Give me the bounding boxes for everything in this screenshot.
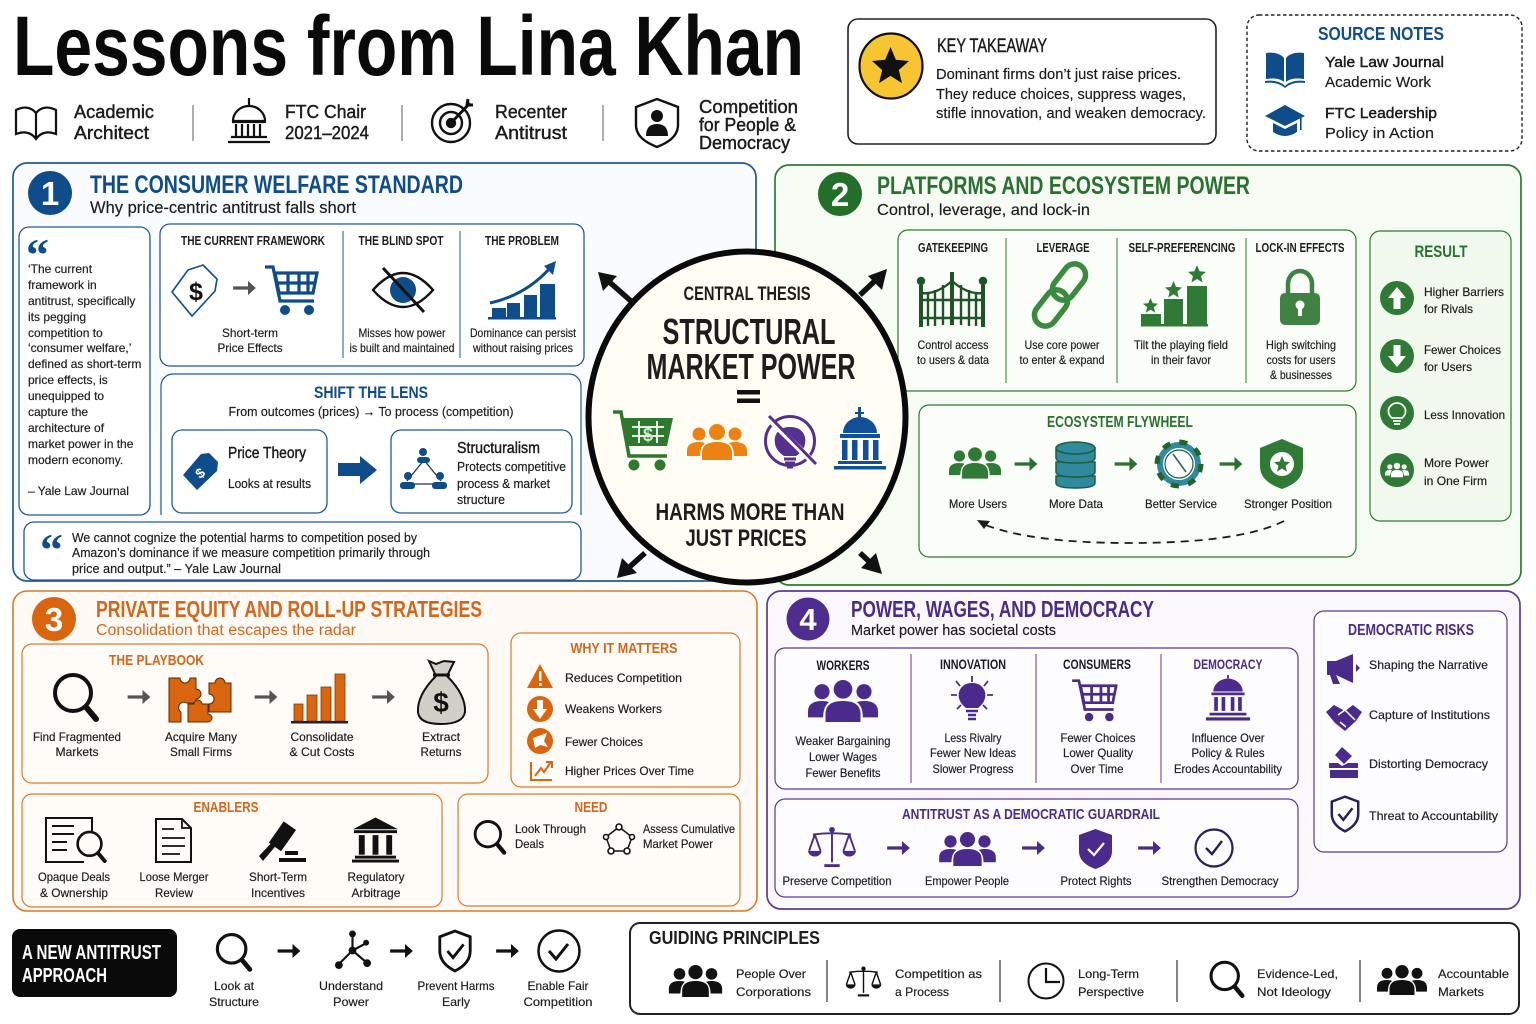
column: workers — [796, 658, 890, 780]
bottom quote: “ — [40, 524, 63, 575]
enabler: regulatory arbitrage: Regulatory — [348, 870, 404, 884]
column: the problem: Dominance can persist — [470, 326, 577, 340]
icon: green cart: $ — [643, 425, 653, 445]
role: academic architect: Architect — [74, 123, 149, 143]
quote text: price effects, is — [28, 373, 108, 387]
quote text: ‘The current — [28, 262, 93, 276]
column: leverage: Use core power — [1024, 338, 1100, 352]
role: competition for people and democracy: Competition — [699, 97, 798, 117]
enabler: loose merger review: Loose Merger — [140, 870, 208, 884]
source: Yale — [1325, 54, 1444, 91]
title: Lessons from Lina Khan — [13, 0, 804, 93]
column: democracy: Policy & Rules — [1192, 746, 1264, 760]
icon: blue book — [1265, 53, 1305, 88]
source: FTC: FTC Leadership — [1325, 105, 1437, 122]
why it matters: WHY IT MATTERS — [570, 640, 678, 657]
principle: accountable markets: Accountable — [1438, 967, 1509, 981]
headline: structural market power: MARKET POWER — [646, 346, 856, 387]
step: consolidate: & Cut Costs — [290, 745, 354, 759]
icon: orange people — [687, 424, 747, 460]
risk: capture: Capture of Institutions — [1369, 708, 1490, 722]
quote mark: “ — [26, 229, 49, 280]
icon: crossed eye — [373, 268, 433, 312]
column: consumers: Over Time — [1070, 762, 1124, 776]
quote box — [19, 227, 150, 515]
banner: a new antitrust approach — [12, 929, 177, 997]
banner: a new antitrust approach: APPROACH — [22, 965, 107, 987]
quote text: framework in — [28, 278, 97, 292]
step: look at structure — [209, 935, 259, 1009]
quote text: – Yale Law Journal — [28, 484, 129, 498]
ecosystem flywheel box — [919, 405, 1356, 557]
need: NEED — [574, 799, 608, 816]
result: fewer choices: Fewer Choices — [1424, 343, 1501, 357]
quote text: ‘consumer welfare,’ — [28, 341, 131, 355]
step: more users — [949, 447, 1007, 511]
result: more power — [1380, 453, 1489, 488]
principle: accountable markets: Markets — [1438, 985, 1484, 999]
principle: long-term perspective: Perspective — [1078, 985, 1144, 999]
need: look through deals: Look Through — [515, 822, 586, 836]
heading: RESULT — [1414, 242, 1468, 261]
panel 3: private equity and roll-up strategies — [13, 591, 757, 911]
column: workers: WORKERS — [816, 658, 870, 673]
bottom quote: We cannot cognize the potential harms to competition posed by — [72, 531, 418, 545]
approach flow — [209, 930, 592, 1009]
panel 4: power, wages, and democracy — [767, 591, 1520, 909]
step: strengthen democracy: Strengthen Democracy — [1162, 874, 1278, 888]
column: workers: Lower Wages — [809, 750, 877, 764]
central thesis — [588, 252, 906, 582]
item: weakens workers — [527, 696, 662, 722]
card: structuralism: structure — [457, 493, 505, 507]
number badge 2: 2 — [831, 176, 849, 213]
result box — [1370, 231, 1511, 521]
column: blind spot: is built and maintained — [350, 341, 454, 355]
principle: people over corporations: People Over — [736, 967, 806, 981]
step: protect rights — [1060, 829, 1132, 888]
step: look at structure: Structure — [209, 995, 259, 1009]
result: less innovation: Less Innovation — [1424, 408, 1505, 422]
principle: evidence-led — [1211, 962, 1338, 999]
step: empower people: Empower People — [925, 874, 1009, 888]
label: central thesis: CENTRAL THESIS — [684, 283, 810, 305]
subheading: Control, leverage, and lock-in — [877, 202, 1090, 219]
item: reduces competition: Reduces Competition — [565, 671, 682, 685]
arrows from center — [598, 269, 887, 578]
arrow: shift — [338, 456, 377, 484]
result: fewer choices — [1380, 339, 1501, 374]
role: academic architect: Academic — [74, 102, 154, 122]
icon: cart — [265, 267, 317, 315]
column: gatekeeping: to users & data — [917, 353, 989, 367]
principle: people over corporations — [669, 965, 811, 999]
heading: POWER, WAGES, AND DEMOCRACY — [851, 596, 1154, 622]
number badge 2 — [818, 172, 862, 216]
result: more power: More Power — [1424, 456, 1489, 470]
step: enable fair competition: Enable Fair — [528, 979, 588, 993]
icon: target — [432, 99, 473, 142]
label: acquire firms: Small Firms — [170, 745, 232, 759]
source: Yale: Yale Law Journal — [1325, 54, 1444, 71]
equals sign — [737, 390, 760, 403]
column: blind spot: THE BLIND SPOT — [358, 233, 444, 248]
column: consumers: Lower Quality — [1063, 746, 1133, 760]
column: current framework: Short-term — [222, 326, 278, 340]
icon: price tag — [172, 265, 217, 316]
principle: competition as a process: Competition as — [895, 967, 982, 981]
enabler: loose merger review — [140, 819, 208, 900]
item: higher prices: Higher Prices Over Time — [565, 764, 694, 778]
column: democracy — [1174, 657, 1282, 776]
risk: accountability — [1332, 797, 1498, 831]
heading: SHIFT THE LENS — [314, 383, 428, 402]
step: preserve competition — [782, 827, 892, 888]
column: gatekeeping: Control access — [918, 338, 988, 352]
step: prevent harms early — [418, 931, 494, 1009]
principle: long-term perspective — [1028, 964, 1144, 999]
column: current framework: THE CURRENT FRAMEWORK — [181, 233, 325, 248]
column: innovation: INNOVATION — [940, 657, 1006, 672]
subheading: Market power has societal costs — [851, 623, 1056, 639]
icon: star badge — [860, 34, 922, 98]
step: preserve competition: Preserve Competition — [782, 874, 892, 888]
step: acquire firms — [169, 678, 231, 722]
result: more power: in One Firm — [1424, 474, 1487, 488]
enabler: opaque deals: Opaque Deals — [38, 870, 110, 884]
icon: crossed-out bulb — [766, 416, 816, 467]
item: fewer choices: Fewer Choices — [565, 735, 643, 749]
role: FTC chair — [285, 102, 369, 143]
step: find fragmented markets — [33, 675, 121, 759]
need: look through deals — [475, 821, 586, 853]
role: recenter antitrust: Antitrust — [495, 123, 567, 143]
column: current framework — [172, 233, 325, 355]
step: extract returns: $ — [433, 687, 449, 718]
principle: evidence-led: Not Ideology — [1257, 985, 1331, 999]
result: less innovation — [1380, 396, 1505, 430]
icon: lock — [1280, 271, 1320, 325]
column: lock-in effects: & businesses — [1270, 368, 1332, 382]
bottom quote — [24, 522, 581, 580]
result: higher barriers — [1380, 281, 1504, 316]
number badge 1: 1 — [41, 175, 59, 212]
column: leverage: LEVERAGE — [1036, 241, 1090, 255]
step: extract returns: Returns — [420, 745, 462, 759]
antitrust as a democratic guardrail: ANTITRUST AS A DEMOCRATIC GUARDRAIL — [902, 806, 1160, 823]
step: understand power: Power — [333, 995, 369, 1009]
column: self-preferencing — [1128, 241, 1236, 367]
column: consumers — [1060, 657, 1136, 776]
need: assess cumulative power — [604, 822, 735, 854]
enabler: short-term incentives: Short-Term — [249, 870, 307, 884]
item: reduces competition — [527, 664, 682, 688]
bottom quote: price and output.” – Yale Law Journal — [72, 562, 281, 576]
enabler: loose merger review: Review — [155, 886, 193, 900]
headline: structural market power — [646, 311, 856, 387]
icon: FTC capitol — [228, 98, 270, 142]
harms grid — [775, 648, 1298, 789]
takeaway text — [936, 67, 1206, 122]
step: more data: More Data — [1049, 497, 1103, 511]
quote text: unequipped to — [28, 389, 104, 403]
quote text: its pegging — [28, 310, 86, 324]
column: self-preferencing: SELF-PREFERENCING — [1128, 241, 1236, 255]
principle: evidence-led: Evidence-Led, — [1257, 967, 1338, 981]
label: acquire firms — [165, 730, 237, 759]
panel: source notes — [1247, 15, 1522, 151]
icon: green cart — [613, 412, 673, 470]
role: academic architect — [74, 102, 154, 143]
column: blind spot: Misses how power — [358, 326, 446, 340]
risk: ballot — [1329, 747, 1488, 778]
quote text: modern economy. — [28, 453, 123, 467]
step: consolidate: Consolidate — [290, 730, 354, 744]
role: competition for people and democracy — [699, 97, 798, 153]
step: protect rights: Protect Rights — [1060, 874, 1132, 888]
need — [458, 794, 740, 906]
step: extract returns: Extract — [422, 730, 461, 744]
bottom quote: Amazon’s dominance if we measure competition primarily through — [72, 546, 430, 560]
role: FTC chair: FTC Chair — [285, 102, 366, 122]
card: price theory: Price Theory — [228, 445, 306, 462]
takeaway text: They reduce choices, suppress wages, — [936, 87, 1186, 103]
icon: chain link — [1030, 259, 1090, 331]
header strip: roles — [16, 97, 798, 153]
column: innovation — [930, 657, 1016, 776]
takeaway text: Dominant firms don’t just raise prices. — [936, 67, 1181, 83]
heading: GUIDING PRINCIPLES — [649, 928, 820, 948]
quote text: antitrust, specifically — [28, 294, 135, 308]
step: understand power — [319, 931, 383, 1009]
source: FTC: Policy in Action — [1325, 125, 1434, 142]
democratic risks: DEMOCRATIC RISKS — [1348, 622, 1474, 639]
icon: stars and bars — [1141, 265, 1208, 326]
headline: structural market power: STRUCTURAL — [662, 311, 836, 352]
need: look through deals: Deals — [515, 837, 544, 851]
column: leverage — [1020, 241, 1104, 367]
step: prevent harms early: Early — [442, 995, 470, 1009]
banner: a new antitrust approach: A NEW ANTITRUST — [22, 942, 161, 964]
principle: accountable markets — [1377, 965, 1509, 999]
principle: competition as a process — [846, 967, 982, 999]
card: structuralism: process & market — [457, 477, 550, 491]
risk: narrative: Shaping the Narrative — [1369, 658, 1488, 672]
icon: price tag: $ — [189, 278, 203, 306]
role: recenter antitrust: Recenter — [495, 102, 567, 122]
step: more users: More Users — [949, 497, 1007, 511]
step: more data — [1049, 442, 1103, 511]
quote text: competition to — [28, 326, 103, 340]
result: higher barriers: for Rivals — [1424, 302, 1473, 316]
icon: graduation cap — [1265, 105, 1305, 136]
item: higher prices — [531, 762, 694, 780]
number badge 3: 3 — [45, 601, 63, 638]
column: lock-in effects — [1256, 241, 1344, 382]
role: competition for people and democracy: for People & — [699, 115, 796, 135]
card: price theory: Looks at results — [228, 477, 311, 491]
heading: PRIVATE EQUITY AND ROLL-UP STRATEGIES — [96, 596, 482, 622]
tagline: harms more than just prices: HARMS MORE THAN — [656, 499, 844, 526]
column: consumers: Fewer Choices — [1060, 731, 1136, 745]
column: innovation: Slower Progress — [932, 762, 1014, 776]
column: democracy: Erodes Accountability — [1174, 762, 1282, 776]
column: gatekeeping: GATEKEEPING — [918, 241, 988, 255]
quote text — [28, 262, 141, 498]
column: workers: Weaker Bargaining — [796, 734, 890, 748]
item: fewer choices — [527, 728, 643, 754]
principle: competition as a process: a Process — [895, 985, 949, 999]
step: strengthen democracy — [1162, 830, 1278, 888]
arrow: feedback loop — [977, 520, 1284, 543]
column: innovation: Less Rivalry — [944, 731, 1002, 745]
role: recenter antitrust — [495, 102, 567, 143]
column: lock-in effects: High switching — [1266, 338, 1336, 352]
column: lock-in effects: costs for users — [1266, 353, 1336, 367]
enabler: opaque deals — [38, 818, 110, 900]
step: enable fair competition: Competition — [524, 995, 592, 1009]
column: innovation: Fewer New Ideas — [930, 746, 1016, 760]
label: acquire firms: Acquire Many — [165, 730, 237, 744]
column: blind spot — [350, 233, 454, 355]
enabler: short-term incentives: Incentives — [251, 886, 305, 900]
step: enable fair competition — [524, 930, 592, 1009]
step: look at structure: Look at — [214, 979, 255, 993]
column: current framework: Price Effects — [218, 341, 282, 355]
heading: PLATFORMS AND ECOSYSTEM POWER — [877, 172, 1250, 200]
icon: open book — [16, 108, 56, 139]
result: higher barriers: Higher Barriers — [1424, 285, 1504, 299]
column: workers: Fewer Benefits — [806, 766, 880, 780]
risk: ballot: Distorting Democracy — [1369, 757, 1488, 771]
column: democracy: DEMOCRACY — [1194, 657, 1262, 672]
mechanisms box — [898, 230, 1356, 391]
column: self-preferencing: Tilt the playing field — [1134, 338, 1228, 352]
column: the problem — [470, 233, 577, 355]
quote text: architecture of — [28, 421, 105, 435]
takeaway text: stifle innovation, and weaken democracy. — [936, 106, 1206, 122]
icon: shield with person — [636, 99, 678, 147]
enabler: short-term incentives — [249, 821, 307, 900]
column: self-preferencing: in their favor — [1151, 353, 1211, 367]
why it matters — [511, 633, 740, 787]
the playbook — [22, 644, 488, 783]
step: extract returns — [418, 661, 465, 759]
step: better service — [1145, 442, 1217, 511]
enabler: regulatory arbitrage — [348, 817, 404, 900]
democratic risks — [1314, 611, 1507, 852]
role: competition for people and democracy: Democracy — [699, 133, 790, 153]
shift the lens box — [161, 374, 581, 515]
icon: rising bars — [488, 261, 556, 320]
need: assess cumulative power: Market Power — [643, 837, 713, 851]
enablers — [22, 794, 442, 907]
card: structuralism — [391, 430, 572, 513]
panel 1: consumer welfare standard — [13, 163, 756, 581]
step: empower people — [925, 832, 1009, 888]
heading: SOURCE NOTES — [1318, 24, 1444, 44]
card: price theory — [172, 430, 327, 513]
card: structuralism: Protects competitive — [457, 460, 566, 474]
step: prevent harms early: Prevent Harms — [418, 979, 494, 993]
column: gatekeeping — [917, 241, 989, 367]
circle — [588, 252, 906, 582]
number badge 4 — [786, 598, 830, 640]
enablers: ENABLERS — [194, 799, 258, 816]
enabler: opaque deals: & Ownership — [40, 886, 108, 900]
principle: long-term perspective: Long-Term — [1078, 967, 1139, 981]
column: democracy: Influence Over — [1192, 731, 1264, 745]
source: Yale: Academic Work — [1325, 74, 1431, 91]
enabler: regulatory arbitrage: Arbitrage — [352, 886, 401, 900]
step: better service: Better Service — [1145, 497, 1217, 511]
number badge 3 — [32, 597, 76, 641]
step: stronger position — [1244, 439, 1332, 511]
heading: ECOSYSTEM FLYWHEEL — [1047, 414, 1193, 431]
result: fewer choices: for Users — [1424, 360, 1472, 374]
heading: KEY TAKEAWAY — [937, 35, 1047, 57]
column: leverage: to enter & expand — [1020, 353, 1104, 367]
subheading: Why price-centric antitrust falls short — [90, 199, 356, 217]
column: the problem: without raising prices — [472, 341, 573, 355]
card: structuralism: Structuralism — [457, 440, 540, 457]
tagline: harms more than just prices — [656, 499, 844, 552]
source: FTC — [1325, 105, 1437, 142]
step: stronger position: Stronger Position — [1244, 497, 1332, 511]
icon: gate — [918, 272, 986, 327]
step: find fragmented markets: Markets — [56, 745, 98, 759]
icon: blue capitol — [834, 407, 886, 470]
step: find fragmented markets: Find Fragmented — [33, 730, 121, 744]
quote text: defined as short-term — [28, 357, 141, 371]
panel 2: platforms and ecosystem power — [775, 165, 1521, 585]
framework comparison box — [160, 224, 584, 366]
number badge 4: 4 — [799, 602, 817, 637]
tagline: harms more than just prices: JUST PRICES — [686, 525, 806, 552]
step: consolidate — [290, 674, 354, 759]
principle: people over corporations: Corporations — [736, 985, 811, 999]
subheading: Consolidation that escapes the radar — [96, 622, 356, 639]
risk: narrative — [1327, 654, 1488, 684]
heading: THE CONSUMER WELFARE STANDARD — [90, 171, 463, 199]
column: lock-in effects: LOCK-IN EFFECTS — [1256, 241, 1344, 255]
risk: accountability: Threat to Accountability — [1369, 809, 1498, 823]
panel: guiding principles — [630, 923, 1519, 1014]
quote text: market power in the — [28, 437, 134, 451]
panel: key takeaway — [848, 19, 1216, 144]
the playbook: THE PLAYBOOK — [109, 652, 204, 669]
step: understand power: Understand — [319, 979, 383, 993]
card: price theory: $ — [192, 464, 208, 482]
subheading: From outcomes (prices) → To process (competition) — [228, 404, 514, 419]
number badge 1 — [28, 171, 72, 215]
column: the problem: THE PROBLEM — [485, 233, 559, 248]
role: FTC chair: 2021–2024 — [285, 123, 369, 143]
quote text: capture the — [28, 405, 88, 419]
risk: capture — [1326, 705, 1490, 731]
item: weakens workers: Weakens Workers — [565, 702, 662, 716]
need: assess cumulative power: Assess Cumulative — [643, 822, 735, 836]
column: consumers: CONSUMERS — [1063, 657, 1131, 672]
antitrust as a democratic guardrail — [775, 799, 1298, 897]
